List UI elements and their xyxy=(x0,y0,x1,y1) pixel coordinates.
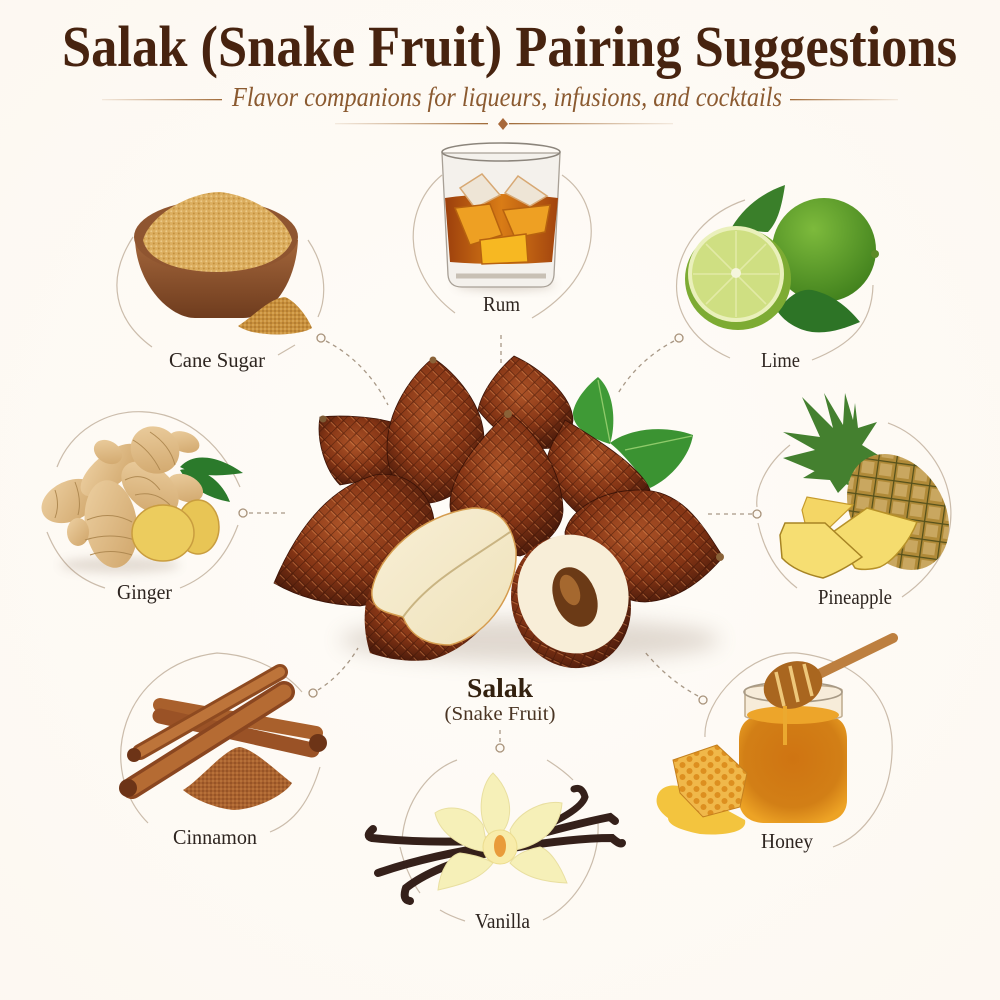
seed xyxy=(544,560,606,634)
pineapple body xyxy=(826,435,970,589)
item: pineapple xyxy=(780,393,970,589)
sugar spill xyxy=(238,297,312,334)
title ornament xyxy=(335,118,673,130)
center label: (Snake Fruit) xyxy=(444,703,556,725)
label: pineapple: Pineapple xyxy=(818,585,892,609)
label: honey: Honey xyxy=(761,829,813,853)
jar xyxy=(739,716,847,823)
fruit: halved salak with seed xyxy=(493,519,649,685)
label: cinnamon: Cinnamon xyxy=(173,825,257,849)
honey puddle xyxy=(657,786,745,834)
honeycomb xyxy=(673,745,747,817)
item: cane sugar bowl xyxy=(134,192,312,334)
fruit: large right xyxy=(565,490,724,602)
fruit: top right xyxy=(478,356,573,449)
pineapple slices xyxy=(802,497,853,527)
fruit: front center xyxy=(450,410,563,556)
label: lime: Lime xyxy=(761,348,800,372)
connector dots xyxy=(239,334,761,752)
fruit: tall center left xyxy=(387,356,484,503)
item: lime xyxy=(685,185,879,332)
item: cinnamon sticks xyxy=(119,672,327,810)
item: vanilla flower and pods xyxy=(369,773,622,901)
salak leaves xyxy=(573,377,693,488)
item: rum glass xyxy=(442,143,560,290)
dashed connectors xyxy=(249,335,752,743)
fruit: peeled salak with cream segments xyxy=(365,508,516,661)
fruit: small right xyxy=(547,420,650,515)
label: ginger: Ginger xyxy=(117,580,172,604)
decorative item rings xyxy=(47,175,951,921)
ginger leaves xyxy=(180,457,243,502)
label: rum: Rum xyxy=(483,292,520,316)
label: cane sugar: Cane Sugar xyxy=(169,348,265,372)
ground shadow xyxy=(340,618,720,662)
pineapple crown xyxy=(783,393,878,493)
subtitle: Flavor companions for liqueurs, infusions, and cocktails xyxy=(231,82,782,112)
fruit: back left xyxy=(319,416,398,485)
honey dipper xyxy=(757,638,893,717)
lime slice xyxy=(685,226,791,330)
label: vanilla: Vanilla xyxy=(475,909,531,933)
center label xyxy=(444,673,556,725)
fruit: large left xyxy=(274,474,434,606)
item: honey jar xyxy=(657,638,893,834)
central salak fruit cluster xyxy=(274,356,724,685)
cinnamon powder xyxy=(183,747,292,810)
center label: Salak xyxy=(467,673,533,703)
item: ginger root xyxy=(34,417,243,573)
